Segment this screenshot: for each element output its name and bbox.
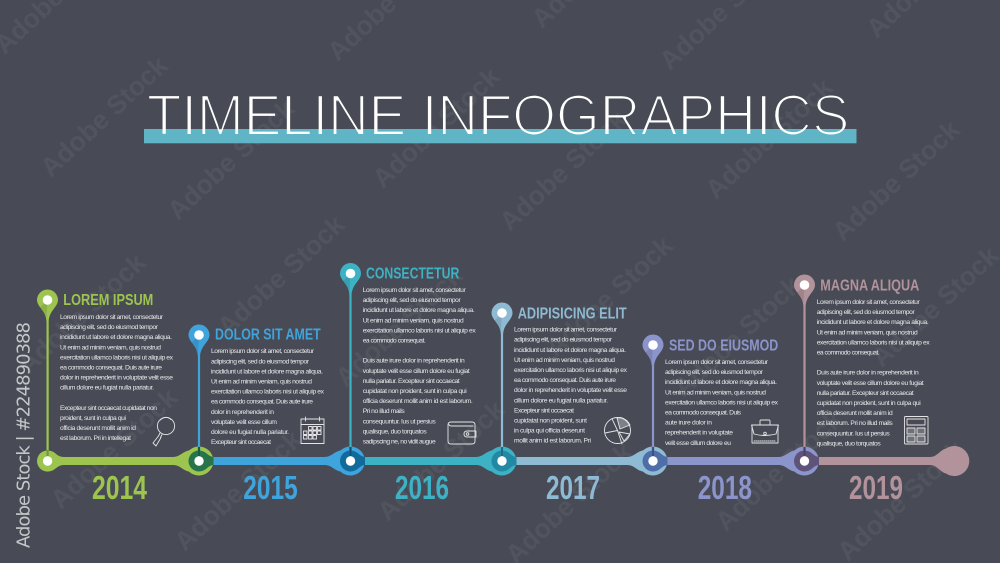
text block: 2016: ea commodo consequat. bbox=[363, 338, 426, 344]
text block: 2016: incididunt ut labore et dolore magna aliqua. bbox=[363, 307, 475, 314]
year: 2018: 2018 bbox=[698, 470, 752, 507]
year: 2019: 2019 bbox=[849, 470, 903, 507]
text block: 2015: Ut enim ad minim veniam, quis nostrud bbox=[211, 378, 312, 386]
timeline segment: 2018 bbox=[668, 447, 820, 476]
icon: briefcase bbox=[752, 420, 778, 443]
text block: 2016 bbox=[363, 287, 476, 446]
year: 2016: 2016 bbox=[395, 470, 449, 507]
text block: 2018: Lorem ipsum dolor sit amet, consectetur bbox=[665, 359, 769, 366]
node: 2017 bbox=[497, 456, 507, 466]
icon: pie chart bbox=[604, 418, 630, 444]
text block: 2016: voluptate velit esse cillum dolore eu fugiat bbox=[363, 368, 470, 375]
text block: 2015: exercitation ullamco laboris nisi ut aliquip ex bbox=[211, 389, 325, 396]
icon: calendar bbox=[301, 417, 324, 444]
text block: 2014: Excepteur sint occaecat cupidatat non bbox=[60, 405, 157, 412]
text block: 2018: aute irure dolor in bbox=[665, 420, 712, 427]
text block: 2019: est laborum. Pri no illud mails bbox=[817, 420, 893, 427]
milestone 2016 bbox=[340, 263, 476, 507]
milestone 2019 bbox=[794, 274, 930, 507]
text block: 2017: cillum dolore eu fugiat nulla pariatur. bbox=[514, 397, 608, 404]
watermark pattern: Adobe Stock bbox=[699, 72, 839, 205]
text block: 2015: voluptate velit esse cillum bbox=[211, 419, 277, 426]
text block: 2014: Lorem ipsum dolor sit amet, consectetur bbox=[60, 314, 164, 321]
year: 2015: 2015 bbox=[243, 470, 298, 507]
watermark pattern: Adobe Stock bbox=[826, 114, 966, 247]
milestone 2014 bbox=[37, 289, 175, 507]
text block: 2019: cupidatat non proident, sunt in culpa qui bbox=[817, 400, 921, 407]
text block: 2018 bbox=[665, 359, 779, 447]
text block: 2019: adipiscing elit, sed do eiusmod tempor bbox=[817, 309, 915, 316]
text block: 2016: consequuntur. Ius ut persius bbox=[363, 418, 436, 425]
text block: 2017: Lorem ipsum dolor sit amet, consectetur bbox=[514, 327, 618, 334]
milestone 2015 bbox=[188, 324, 325, 507]
text block: 2016: cupidatat non proident, sunt in culpa qui bbox=[363, 388, 467, 395]
timeline segment: 2014 bbox=[37, 447, 214, 476]
watermark pattern: Adobe Stock bbox=[366, 61, 506, 194]
icon: calculator bbox=[904, 416, 928, 444]
pin: 2017 bbox=[492, 302, 512, 461]
text block: 2014: dolor in reprehenderit in voluptate velit esse bbox=[60, 375, 173, 382]
timeline segment: 2017 bbox=[516, 447, 668, 476]
text block: 2018: Ut enim ad minim veniam, quis nostrud bbox=[665, 389, 766, 396]
watermark pattern: Adobe Stock bbox=[667, 270, 807, 403]
text block: 2017: adipiscing elit, sed do eiusmod tempor bbox=[514, 337, 613, 344]
watermark pattern: Adobe Stock bbox=[831, 434, 971, 563]
heading: 2014: LOREM IPSUM bbox=[63, 292, 153, 309]
text block: 2016: Duis aute irure dolor in reprehenderit in bbox=[363, 358, 465, 365]
text block: 2015: dolor in reprehenderit in bbox=[211, 409, 274, 416]
text block: 2017: in culpa qui officia deserunt bbox=[514, 428, 585, 435]
text block: 2018: velit esse cillum dolore eu bbox=[665, 440, 731, 447]
heading: 2016: CONSECTETUR bbox=[366, 266, 460, 283]
text block: 2014: ea commodo consequat. Duis aute irure bbox=[60, 364, 162, 372]
text block: 2016: sadipscing ne, no vidit augue bbox=[363, 438, 436, 446]
text block: 2018: adipiscing elit, sed do eiusmod tempor bbox=[665, 369, 764, 376]
watermark pattern: Adobe Stock bbox=[34, 50, 174, 183]
watermark pattern: Adobe Stock bbox=[493, 104, 633, 237]
text block: 2019: qualisque, duo torquatos bbox=[817, 440, 881, 447]
text block: 2015 bbox=[211, 348, 325, 446]
pin: 2014 bbox=[37, 289, 58, 461]
text block: 2018: incididunt ut labore et dolore magna aliqua. bbox=[665, 379, 777, 386]
watermark pattern: Adobe Stock bbox=[539, 230, 679, 363]
text block: 2019: Ut enim ad minim veniam, quis nostrud bbox=[817, 329, 918, 336]
text block: 2019: ea commodo consequat. bbox=[817, 350, 880, 356]
text block: 2019: Lorem ipsum dolor sit amet, consectetur bbox=[817, 299, 920, 306]
text block: 2017: dolor in reprehenderit in voluptate velit esse bbox=[514, 387, 627, 394]
heading: 2017: ADIPISICING ELIT bbox=[518, 305, 627, 322]
milestone 2017 bbox=[492, 302, 630, 507]
side stock credit: Adobe Stock | #224890388 bbox=[13, 322, 34, 548]
heading: 2019: MAGNA ALIQUA bbox=[820, 278, 920, 295]
text block: 2016: qualisque, duo torquatos bbox=[363, 428, 427, 435]
text block: 2016: officia deserunt mollit anim id est laborum. bbox=[363, 398, 473, 405]
year: 2014: 2014 bbox=[92, 470, 147, 507]
node: 2019 bbox=[800, 456, 809, 466]
text block: 2018: exercitation ullamco laboris nisi ut aliquip ex bbox=[665, 399, 779, 406]
timeline segment: 2019 with end cap bbox=[819, 446, 969, 476]
text block: 2016: adipiscing elit, sed do eiusmod tempor bbox=[363, 297, 461, 304]
text block: 2015: ea commodo consequat. Duis aute irure bbox=[211, 399, 313, 406]
text block: 2018: ea commodo consequat. Duis bbox=[665, 410, 742, 416]
text block: 2016: Ut enim ad minim veniam, quis nostrud bbox=[363, 317, 464, 324]
text block: 2015: Excepteur sint occaecat bbox=[211, 439, 271, 446]
text block: 2019: consequuntur. Ius ut persius bbox=[817, 430, 890, 437]
text block: 2014: incididunt ut labore et dolore magna aliqua. bbox=[60, 334, 172, 341]
icon: wallet bbox=[448, 422, 476, 444]
text block: 2017: incididunt ut labore et dolore magna aliqua. bbox=[514, 347, 626, 354]
pin: 2018 bbox=[642, 334, 664, 461]
watermark pattern: Adobe Stock bbox=[168, 424, 308, 557]
watermark pattern: Adobe Stock bbox=[12, 247, 152, 380]
pin: 2016 bbox=[340, 263, 361, 461]
text block: 2018: reprehenderit in voluptate bbox=[665, 430, 733, 437]
text block: 2014 bbox=[60, 314, 174, 442]
text block: 2019: incididunt ut labore et dolore magna aliqua. bbox=[817, 319, 929, 326]
text block: 2015: Lorem ipsum dolor sit amet, consectetur bbox=[211, 348, 315, 355]
text block: 2016: Lorem ipsum dolor sit amet, consectetur bbox=[363, 287, 466, 294]
text block: 2019: exercitation ullamco laboris nisi ut aliquip ex bbox=[817, 339, 930, 346]
watermark pattern: Adobe Stock bbox=[709, 404, 849, 537]
text block: 2014: exercitation ullamco laboris nisi ut aliquip ex bbox=[60, 354, 174, 361]
title: TIMELINE INFOGRAPHICS bbox=[147, 84, 850, 148]
text block: 2014: est laborum. Pri in intellegat bbox=[60, 435, 131, 442]
node: 2016 bbox=[346, 456, 355, 466]
title underline bar bbox=[144, 129, 856, 143]
text block: 2017: Ut enim ad minim veniam, quis nostrud bbox=[514, 357, 615, 364]
text block: 2017 bbox=[514, 327, 628, 445]
text block: 2019: voluptate velit esse cillum dolore eu fugiat bbox=[817, 380, 924, 387]
milestone 2018 bbox=[642, 334, 779, 507]
text block: 2019: nulla pariatur. Excepteur sint occaecat bbox=[817, 390, 914, 397]
text block: 2014: proident, sunt in culpa qui bbox=[60, 415, 126, 422]
text block: 2014: cillum dolore eu fugiat nulla pariatur. bbox=[60, 385, 154, 392]
timeline segment: 2016 bbox=[365, 447, 517, 476]
icon: magnifying glass bbox=[153, 417, 175, 446]
text block: 2015: incididunt ut labore et dolore magna aliqua. bbox=[211, 368, 323, 375]
text block: 2019: Duis aute irure dolor in reprehenderit in bbox=[817, 370, 919, 377]
text block: 2014: officia deserunt mollit anim id bbox=[60, 425, 136, 432]
pin: 2019 bbox=[794, 274, 815, 461]
text block: 2016: Pri no illud mails bbox=[363, 408, 405, 415]
heading: 2018: SED DO EIUSMOD bbox=[669, 337, 778, 354]
node: 2018 bbox=[648, 456, 658, 466]
text block: 2015: dolore eu fugiat nulla pariatur. bbox=[211, 429, 289, 436]
text block: 2017: exercitation ullamco laboris nisi ut aliquip ex bbox=[514, 367, 628, 374]
watermark pattern: Adobe Stock bbox=[44, 382, 184, 515]
text block: 2019 bbox=[817, 299, 930, 447]
heading: 2015: DOLOR SIT AMET bbox=[215, 326, 321, 344]
watermark pattern: Adobe Stock bbox=[329, 260, 469, 393]
text block: 2016: nulla pariatur. Excepteur sint occaecat bbox=[363, 378, 460, 385]
text block: 2014: Ut enim ad minim veniam, quis nostrud bbox=[60, 344, 161, 351]
year: 2017: 2017 bbox=[546, 470, 600, 507]
watermark pattern: Adobe Stock bbox=[371, 394, 511, 527]
text block: 2017: Excepteur sint occaecat bbox=[514, 407, 574, 414]
timeline segment: 2015 bbox=[214, 446, 366, 476]
watermark pattern: Adobe Stock bbox=[211, 209, 351, 342]
pin: 2015 bbox=[188, 324, 210, 461]
text block: 2017: ea commodo consequat. Duis aute irure bbox=[514, 377, 616, 384]
text block: 2016: exercitation ullamco laboris nisi ut aliquip ex bbox=[363, 327, 476, 334]
node: 2014 bbox=[43, 456, 52, 466]
text block: 2017: mollit anim id est laborum. Pri bbox=[514, 438, 592, 445]
watermark pattern: Adobe Stock bbox=[161, 93, 301, 226]
text block: 2015: adipiscing elit, sed do eiusmod tempor bbox=[211, 358, 310, 365]
text block: 2014: adipiscing elit, sed do eiusmod tempor bbox=[60, 324, 159, 331]
text block: 2017: cupidatat non proident, sunt bbox=[514, 418, 587, 424]
text block: 2019: officia deserunt mollit anim id bbox=[817, 410, 893, 417]
node: 2015 bbox=[194, 456, 204, 466]
